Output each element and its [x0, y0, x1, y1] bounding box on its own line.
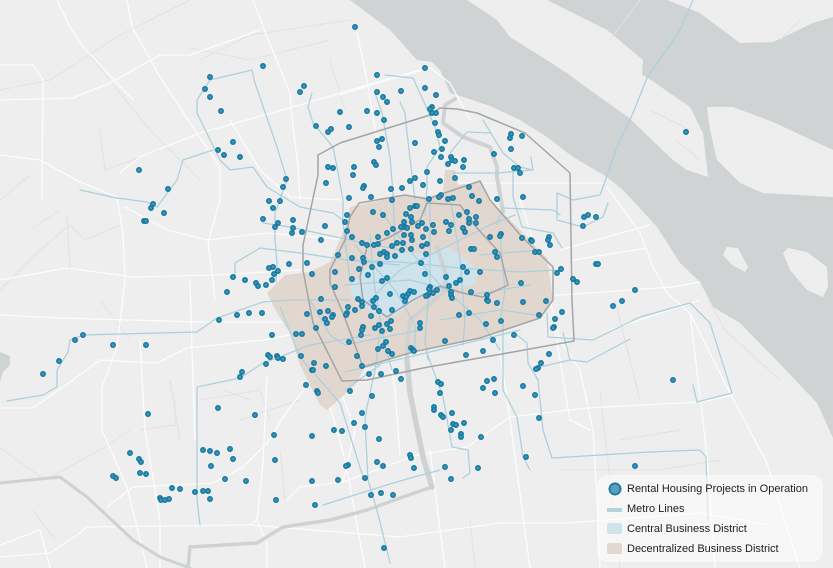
legend label: decentralized business district: Decentralized Business District	[627, 543, 779, 555]
islands	[467, 0, 833, 297]
decentralized business district	[267, 170, 553, 410]
legend swatch: decentralized business district	[607, 543, 622, 554]
inner ring road	[360, 203, 508, 317]
rental housing project markers	[41, 25, 688, 550]
middle ring road	[330, 181, 553, 367]
legend swatch: central business district	[607, 523, 622, 534]
legend marker: rental housing project	[608, 482, 622, 496]
outer ring road	[303, 108, 574, 381]
legend label: central business district: Central Business District	[627, 523, 747, 535]
inland rivers	[0, 99, 503, 568]
legend swatch: metro lines	[607, 508, 622, 512]
water: Yangtze estuary	[0, 0, 833, 438]
central business district	[350, 247, 480, 317]
legend panel	[597, 475, 823, 562]
legend label: rental housing: Rental Housing Projects in Operation	[627, 483, 808, 495]
legend label: metro lines: Metro Lines	[627, 503, 684, 515]
